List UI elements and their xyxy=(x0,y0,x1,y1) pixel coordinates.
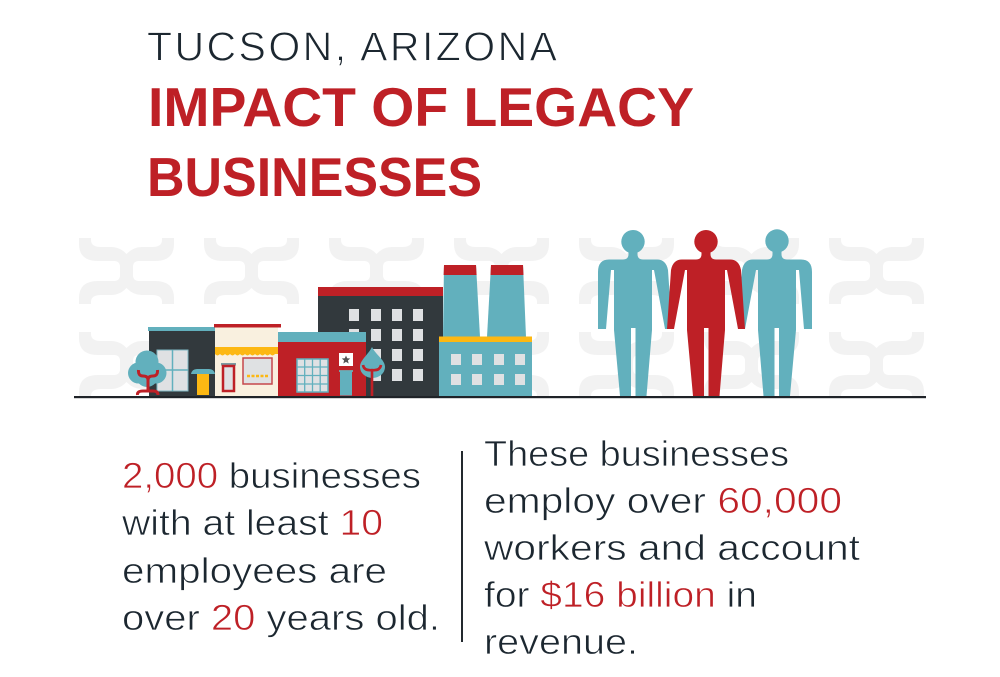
text block: employment and revenue statistic: revenue. xyxy=(484,621,638,662)
title xyxy=(147,24,694,208)
text block: businesses statistic: 2,000 businesses xyxy=(122,455,421,496)
background pattern xyxy=(79,238,924,398)
text block: employment and revenue statistic: workers and account xyxy=(483,527,860,568)
text block: businesses statistic: employees are xyxy=(122,550,387,591)
text block: businesses statistic xyxy=(121,455,440,638)
text block: employment and revenue statistic xyxy=(483,433,860,662)
illustration: dark shop xyxy=(148,327,215,396)
text block: employment and revenue statistic: employ over 60,000 xyxy=(484,480,842,521)
icon: person centre xyxy=(667,230,745,396)
icon: tree left xyxy=(128,350,166,395)
text block: employment and revenue statistic: for $16 billion in xyxy=(484,574,757,615)
illustration: cream shop xyxy=(214,324,281,396)
icon: person left xyxy=(598,230,672,396)
icon: tree right xyxy=(360,347,385,396)
right chimney xyxy=(487,265,526,337)
main heading line 1: IMPACT OF LEGACY xyxy=(148,76,694,138)
left chimney xyxy=(443,265,480,337)
ground line xyxy=(74,396,926,398)
divider xyxy=(461,451,463,642)
illustration: office tower xyxy=(318,287,443,396)
illustration: factory xyxy=(439,265,532,396)
illustration: red shop xyxy=(278,332,366,396)
main heading line 2: BUSINESSES xyxy=(147,146,482,208)
text block: employment and revenue statistic: These businesses xyxy=(484,433,789,474)
text block: businesses statistic: with at least 10 xyxy=(121,502,383,543)
icon: person right xyxy=(738,229,812,396)
location heading: TUCSON, ARIZONA xyxy=(147,24,558,70)
text block: businesses statistic: over 20 years old. xyxy=(122,597,440,638)
